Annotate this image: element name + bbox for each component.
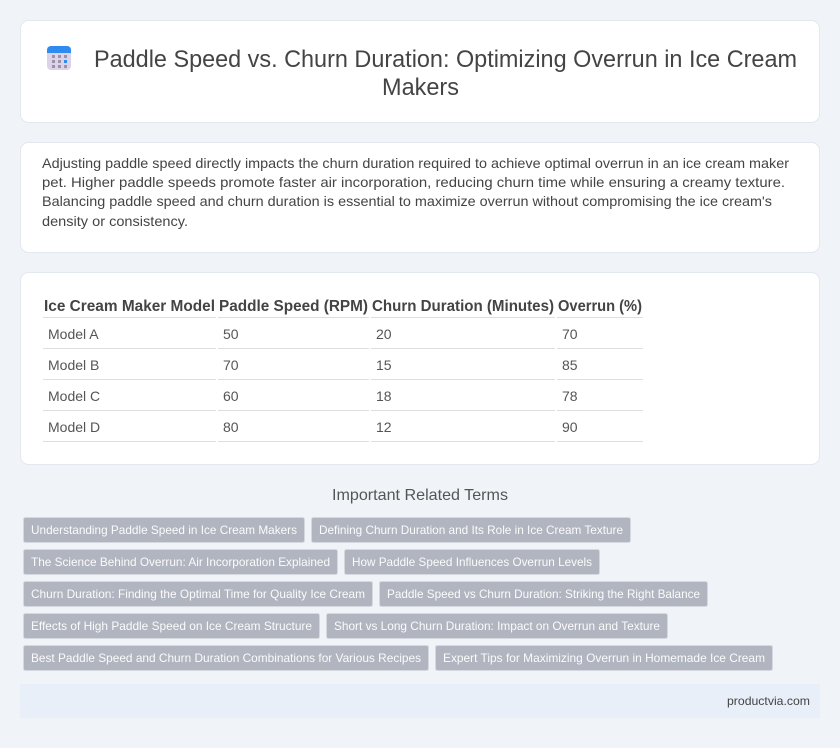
table header: Churn Duration (Minutes) <box>372 298 554 315</box>
icon: calendar <box>47 46 71 70</box>
row: Model C: 60 <box>223 388 239 404</box>
panel: data table <box>20 272 820 464</box>
tag row 5: Expert Tips for Maximizing Overrun in Homemade Ice Cream <box>443 651 765 665</box>
row: Model D: Model D <box>48 419 100 435</box>
tag row 1 <box>24 518 630 542</box>
panel: title card <box>20 20 820 122</box>
tag row 1: Understanding Paddle Speed in Ice Cream Makers <box>31 523 297 537</box>
row: Model D: 80 <box>223 419 239 435</box>
title <box>94 46 797 101</box>
footer <box>20 684 820 718</box>
table header: Ice Cream Maker Model <box>44 298 215 315</box>
tag row 4 <box>24 614 668 638</box>
panel: intro paragraph: density or consistency. <box>42 213 188 229</box>
heading: related terms: Important Related Terms <box>332 487 508 504</box>
row: Model B: 15 <box>376 357 392 373</box>
table rules <box>43 318 643 442</box>
tag row 4: Short vs Long Churn Duration: Impact on Overrun and Texture <box>334 619 660 633</box>
row: Model D: 12 <box>376 419 392 435</box>
table header: Overrun (%) <box>558 298 642 315</box>
panel: intro paragraph: pet. Higher paddle speeds promote faster air incorporation, reducing churn time while ensuring a creamy texture. <box>42 174 785 190</box>
row: Model A <box>48 326 578 342</box>
tag row 3: Churn Duration: Finding the Optimal Time for Quality Ice Cream <box>31 587 365 601</box>
tag row 2 <box>24 550 600 574</box>
row: Model B: Model B <box>48 357 99 373</box>
row: Model D: 90 <box>562 419 578 435</box>
tag row 1: Defining Churn Duration and Its Role in Ice Cream Texture <box>319 523 623 537</box>
tag row 4: Effects of High Paddle Speed on Ice Cream Structure <box>31 619 312 633</box>
tag row 2: How Paddle Speed Influences Overrun Levels <box>352 555 592 569</box>
table header <box>44 298 642 315</box>
row: Model A: 50 <box>223 326 239 342</box>
panel: intro paragraph <box>20 142 820 252</box>
row: Model C: 78 <box>562 388 578 404</box>
row: Model C <box>48 388 578 404</box>
tag row 5: Best Paddle Speed and Churn Duration Combinations for Various Recipes <box>31 651 421 665</box>
row: Model C: 18 <box>376 388 392 404</box>
tag row 5 <box>24 646 772 670</box>
panel: intro paragraph: Balancing paddle speed and churn duration is essential to maximize overrun without compromising the ice cream's <box>42 193 772 209</box>
footer: productvia.com <box>727 694 810 708</box>
title: Paddle Speed vs. Churn Duration: Optimizing Overrun in Ice Cream <box>94 46 797 73</box>
row: Model A: 70 <box>562 326 578 342</box>
table header: Paddle Speed (RPM) <box>219 298 368 315</box>
row: Model A: 20 <box>376 326 392 342</box>
tag row 2: The Science Behind Overrun: Air Incorporation Explained <box>31 555 330 569</box>
tag row 3: Paddle Speed vs Churn Duration: Striking the Right Balance <box>387 587 700 601</box>
row: Model B: 85 <box>562 357 578 373</box>
row: Model B <box>48 357 578 373</box>
row: Model B: 70 <box>223 357 239 373</box>
row: Model A: Model A <box>48 326 99 342</box>
row: Model D <box>48 419 578 435</box>
tag row 3 <box>24 582 708 606</box>
row: Model C: Model C <box>48 388 100 404</box>
title: Makers <box>382 74 459 101</box>
panel: intro paragraph: Adjusting paddle speed directly impacts the churn duration required to achieve optimal overrun in an ice cream maker <box>42 155 789 171</box>
related term tags <box>24 518 772 670</box>
